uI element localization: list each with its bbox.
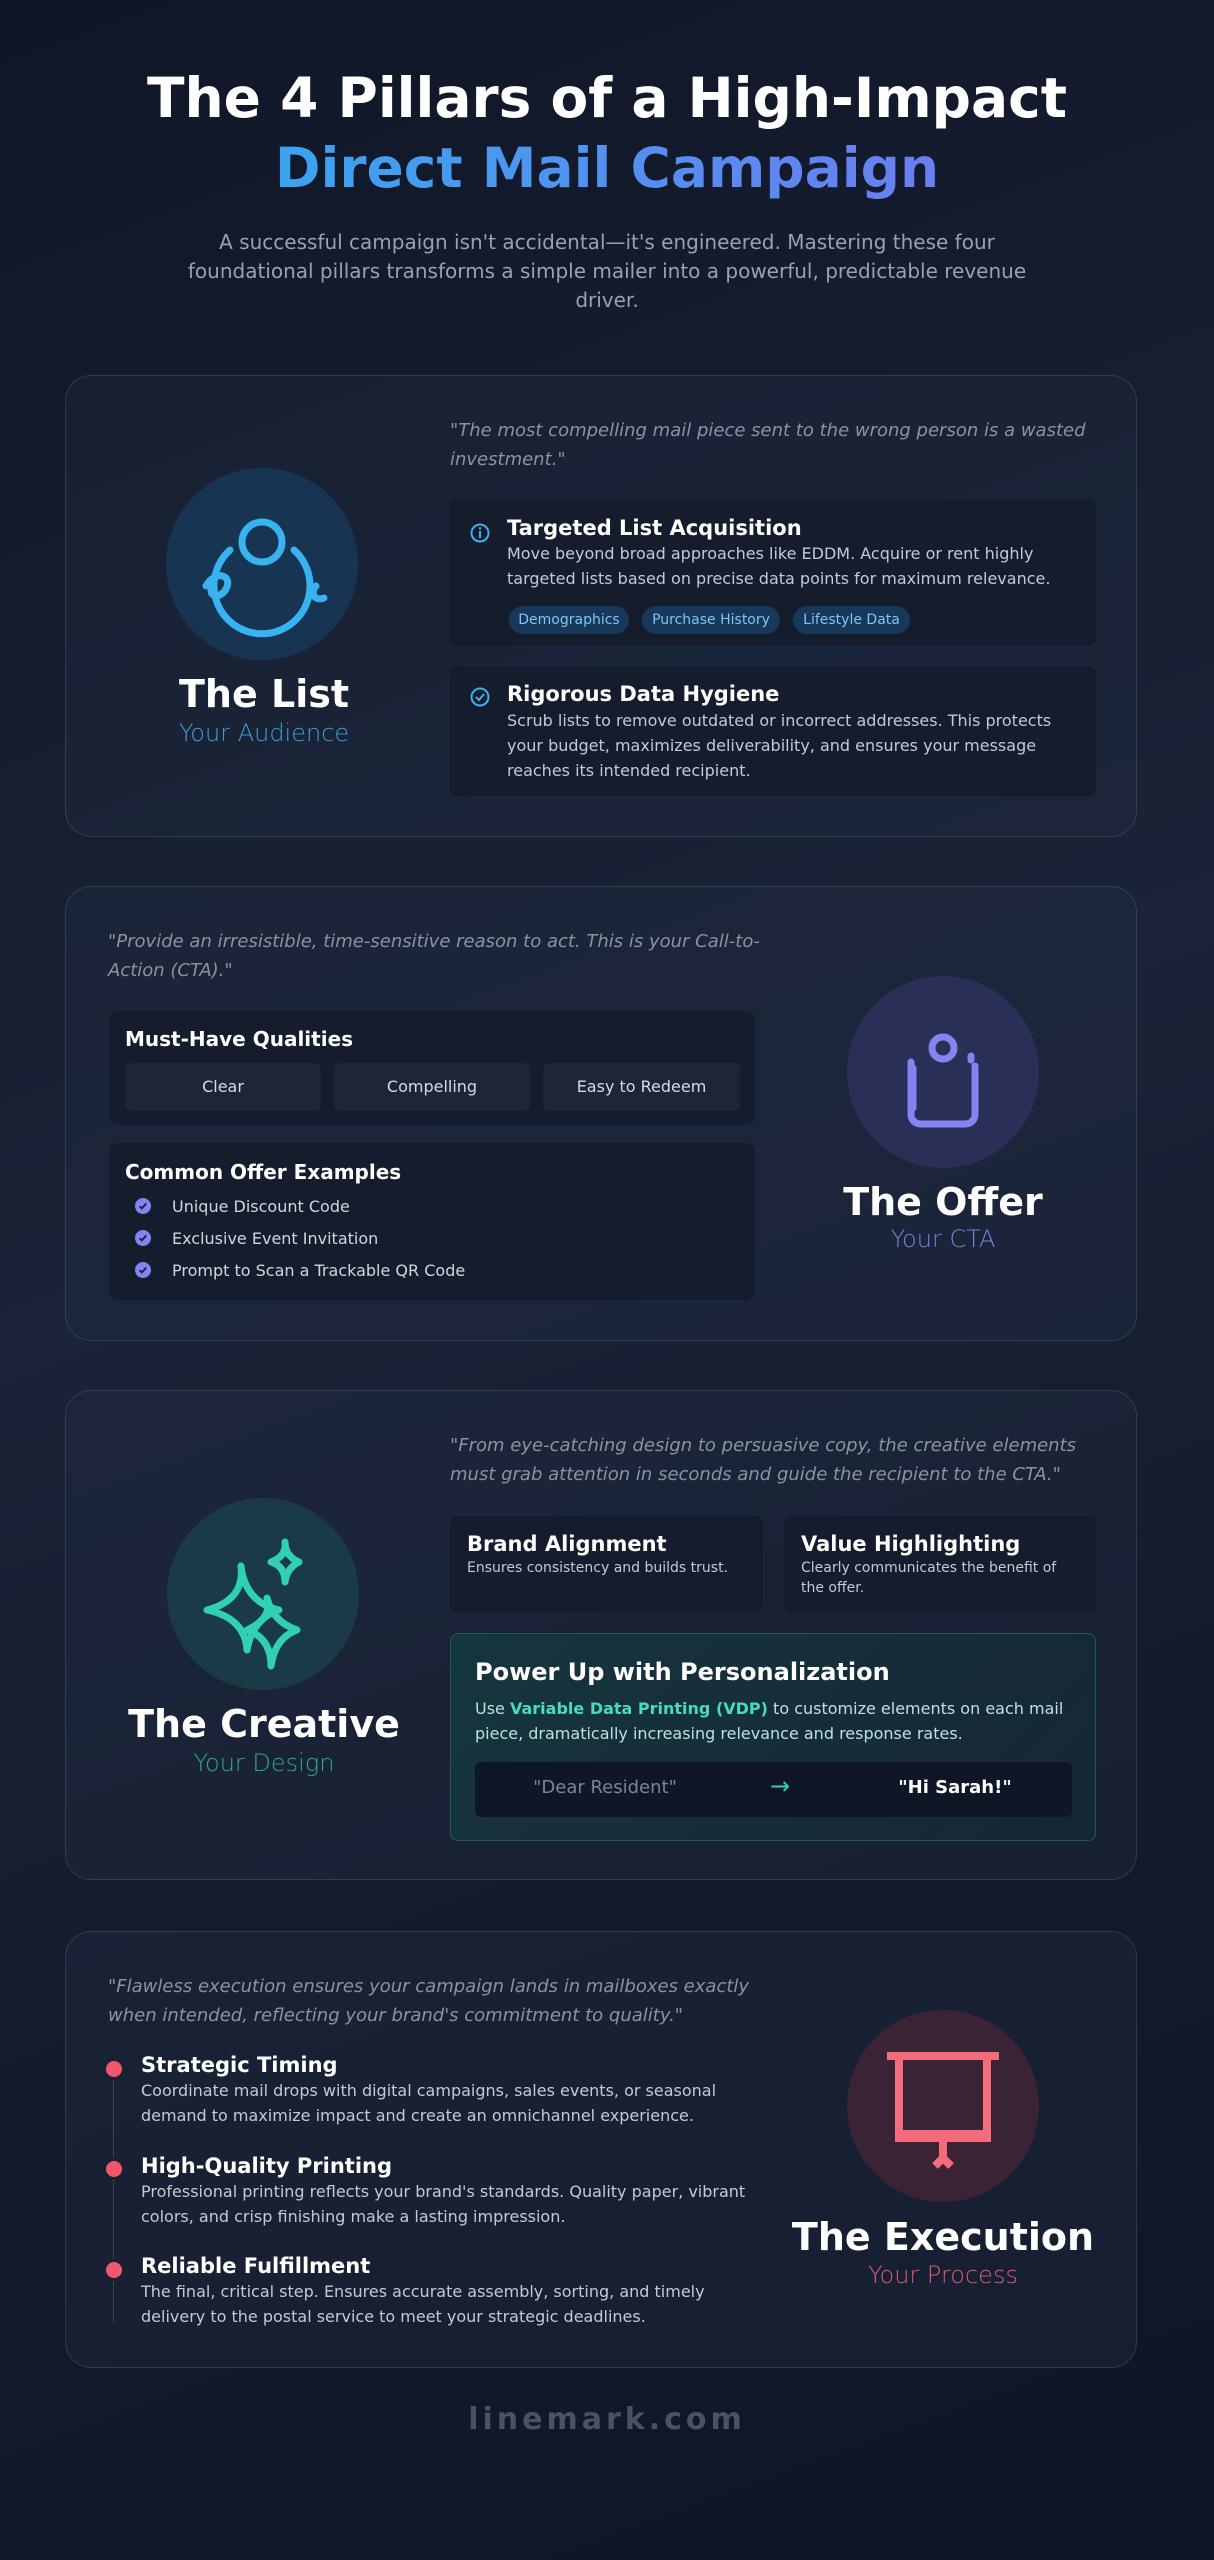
title: Direct Mail Campaign (275, 136, 939, 200)
panel: the execution (65, 1931, 1137, 2368)
title: The 4 Pillars of a High-Impact (147, 66, 1067, 130)
comparison (475, 1762, 1072, 1817)
panel: the execution: Strategic Timing (141, 2053, 338, 2077)
footer: linemark.com (468, 2402, 746, 2437)
comparison: "Dear Resident" (533, 1777, 677, 1798)
panel: the offer: Clear (202, 1077, 244, 1096)
heading: Must-Have Qualities (125, 1027, 353, 1051)
card title: Targeted List Acquisition (507, 516, 802, 540)
list (135, 1197, 465, 1280)
icon: info (470, 524, 490, 542)
panel: the execution: High-Quality Printing (141, 2154, 392, 2178)
quote: "From eye-catching design to persuasive copy, the creative elements must grab attention in seconds and guide the recipient to the CTA." (450, 1435, 1076, 1485)
panel: the execution: The final, critical step. Ensures accurate assembly, sorting, and timely delivery to the postal service to meet your strategic deadlines. (141, 2282, 705, 2326)
subheading: Your CTA (891, 1225, 995, 1253)
panel: the offer: Unique Discount Code (172, 1197, 350, 1216)
subheading: Your Audience (179, 719, 349, 747)
card title: Value Highlighting (801, 1532, 1020, 1556)
subheading: Your Process (868, 2261, 1018, 2289)
panel: the execution: Reliable Fulfillment (141, 2254, 370, 2278)
title (147, 66, 1067, 200)
heading: Common Offer Examples (125, 1160, 401, 1184)
panel: the list (65, 375, 1137, 837)
panel: the execution: Professional printing reflects your brand's standards. Quality paper, vibrant colors, and crisp finishing make a lasting impression. (141, 2182, 745, 2226)
card body: Move beyond broad approaches like EDDM. Acquire or rent highly targeted lists based on precise data points for maximum relevance. (507, 544, 1050, 588)
panel: the offer: Easy to Redeem (577, 1077, 706, 1096)
tags (509, 606, 910, 634)
box: personalization (450, 1633, 1096, 1841)
quote: "Provide an irresistible, time-sensitive reason to act. This is your Call-to-Action (CTA)." (108, 931, 760, 981)
heading: The List: The List (179, 672, 349, 716)
icon: presentation (847, 2010, 1039, 2202)
quote: "The most compelling mail piece sent to the wrong person is a wasted investment." (450, 420, 1086, 470)
panel: the list: Purchase History (652, 612, 770, 628)
box: must-have qualities (109, 1011, 755, 1125)
card: brand alignment (450, 1516, 763, 1613)
card: targeted list (450, 499, 1096, 646)
panel: the creative (65, 1390, 1137, 1880)
icon: audience (166, 468, 358, 660)
panel: the offer (65, 886, 1137, 1341)
heading: The Execution: The Execution (792, 2215, 1094, 2259)
quote: "Flawless execution ensures your campaign lands in mailboxes exactly when intended, reflecting your brand's commitment to quality." (108, 1976, 749, 2026)
pills (125, 1063, 740, 1111)
card title: Rigorous Data Hygiene (507, 682, 779, 706)
panel: the offer: Prompt to Scan a Trackable QR Code (172, 1261, 465, 1280)
card title: Brand Alignment (467, 1532, 667, 1556)
heading: The Creative: The Creative (128, 1702, 400, 1746)
heading: Power Up with Personalization (475, 1658, 890, 1686)
icon: sparkles (167, 1498, 359, 1690)
icon: offer (847, 976, 1039, 1168)
icon: check (470, 688, 490, 706)
card: data hygiene (450, 666, 1096, 796)
timeline (106, 2053, 745, 2326)
comparison: → (770, 1772, 790, 1800)
panel: the execution: Coordinate mail drops with digital campaigns, sales events, or seasonal demand to maximize impact and create an omnichannel experience. (141, 2081, 716, 2125)
panel: the offer: Exclusive Event Invitation (172, 1229, 378, 1248)
card body: Ensures consistency and builds trust. (467, 1560, 728, 1576)
panel: the list: Demographics (518, 612, 620, 628)
body: Use Variable Data Printing (VDP) to customize elements on each mail piece, dramatically increasing relevance and response rates. (475, 1699, 1063, 1743)
panel: the offer: Compelling (387, 1077, 477, 1096)
subtitle: A successful campaign isn't accidental—it's engineered. Mastering these four foundational pillars transforms a simple mailer into a powerful, predictable revenue driver. (188, 230, 1026, 312)
heading: The Offer: The Offer (843, 1180, 1043, 1224)
subheading: Your Design (194, 1749, 334, 1777)
panel: the list: Lifestyle Data (803, 612, 900, 628)
comparison: "Hi Sarah!" (898, 1777, 1012, 1798)
card body: Clearly communicates the benefit of the offer. (801, 1560, 1056, 1596)
card: value highlighting (784, 1516, 1096, 1613)
card body: Scrub lists to remove outdated or incorrect addresses. This protects your budget, maximizes deliverability, and ensures your message reaches its intended recipient. (507, 711, 1051, 780)
box: offer examples (109, 1143, 755, 1300)
